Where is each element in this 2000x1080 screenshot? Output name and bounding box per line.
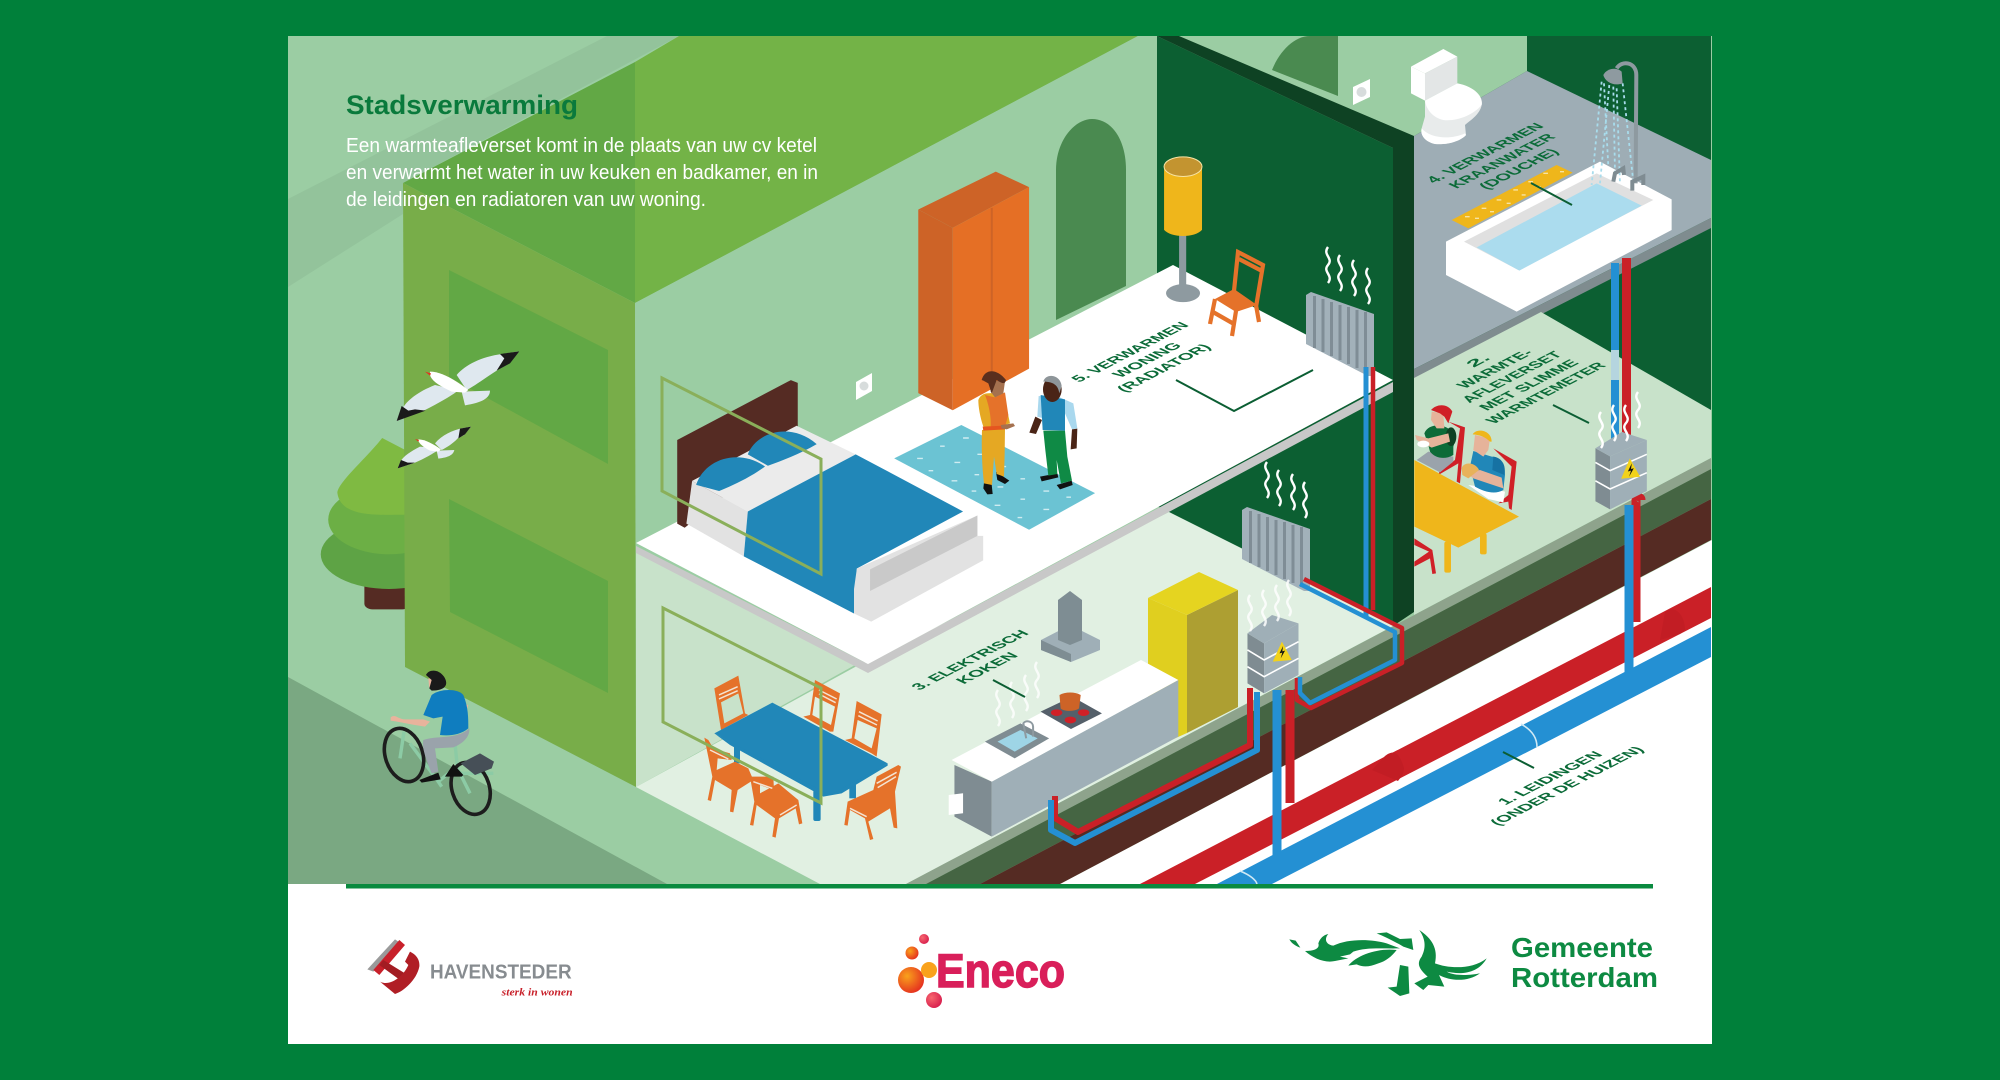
blanket bbox=[744, 454, 963, 613]
torso bbox=[423, 690, 468, 735]
pipes from mains to left meter bbox=[1277, 690, 1290, 856]
couple at table bbox=[1414, 405, 1519, 574]
label 1: leidingen bbox=[1470, 737, 1648, 828]
first-floor slab bbox=[636, 265, 1393, 673]
sheets bbox=[692, 426, 856, 511]
second arched doorway bbox=[1272, 36, 1338, 96]
yellow fridge bbox=[1148, 572, 1238, 745]
shoes bbox=[419, 764, 463, 783]
wall socket bedroom bbox=[856, 373, 872, 400]
extractor hood bbox=[1041, 591, 1100, 662]
label 1: leidingen: 1. LEIDINGEN bbox=[1495, 750, 1607, 807]
label 5: verwarmen woning: WONING bbox=[1109, 341, 1186, 380]
intro text: en verwarmt het water in uw keuken en badkamer, en in bbox=[346, 162, 818, 184]
pipes from meter to bathtub bbox=[1611, 258, 1631, 445]
label 3: elektrisch koken bbox=[909, 629, 1050, 700]
emblem bbox=[367, 939, 419, 994]
bathtub with shower bbox=[1446, 63, 1672, 312]
red chairs bbox=[1438, 422, 1517, 510]
leader 5 bbox=[1176, 370, 1313, 411]
kitchen wall under slab bbox=[636, 552, 855, 787]
label 4: verwarmen kraanwater: KRAANWATER bbox=[1446, 132, 1560, 191]
footboard bbox=[854, 516, 983, 622]
meter box right bbox=[1595, 432, 1647, 509]
heat waves downstairs bbox=[1265, 462, 1307, 518]
wordmark: HAVENSTEDER bbox=[430, 961, 572, 983]
label 2: warmte-afleverset: WARMTEMETER bbox=[1483, 361, 1610, 426]
back wall of living room bbox=[635, 36, 1158, 546]
arched doorway bbox=[1056, 119, 1126, 320]
bath taps bbox=[1613, 168, 1643, 191]
hair bbox=[426, 671, 446, 691]
icon: tree bbox=[321, 438, 457, 609]
window frame kitchen bbox=[663, 608, 821, 803]
bathtub bbox=[1446, 162, 1672, 312]
title: Stadsverwarming bbox=[346, 90, 578, 120]
intro text: Een warmteafleverset komt in de plaats van uw cv ketel bbox=[346, 135, 817, 157]
pipes from mains to right meter bbox=[1629, 498, 1641, 672]
kitchen counter bbox=[949, 660, 1178, 837]
pipes to sink bbox=[1051, 688, 1257, 843]
floor lamp bbox=[1164, 157, 1202, 302]
white card bbox=[288, 36, 1712, 1044]
kitchen floor bbox=[636, 512, 1395, 884]
pipe: blue district main bbox=[1217, 627, 1711, 884]
man seated bbox=[1462, 431, 1505, 502]
dining set bbox=[704, 676, 901, 840]
label 2: warmte-afleverset: WARMTE- bbox=[1454, 348, 1538, 391]
ground floor room right bbox=[1414, 312, 1711, 615]
label 2: warmte-afleverset: MET SLIMME bbox=[1476, 358, 1583, 413]
pillows bbox=[696, 432, 817, 491]
icon: small seagull bbox=[398, 427, 471, 468]
orbs bbox=[898, 934, 942, 1008]
woman seated bbox=[1415, 405, 1456, 472]
stove bbox=[1041, 692, 1102, 729]
label 3: elektrisch koken: 3. ELEKTRISCH bbox=[909, 629, 1033, 692]
tagline: sterk in wonen bbox=[500, 988, 573, 999]
radiator downstairs bbox=[1242, 507, 1310, 591]
cooking steam bbox=[996, 662, 1039, 726]
dark dividing wall bbox=[1157, 36, 1393, 626]
label 2: warmte-afleverset: 2. bbox=[1463, 353, 1495, 369]
wordmark bbox=[1511, 932, 1658, 993]
leader 2 bbox=[1553, 405, 1589, 423]
wheels bbox=[378, 723, 497, 819]
wordmark: Rotterdam bbox=[1511, 962, 1658, 993]
label 3: elektrisch koken: KOKEN bbox=[953, 651, 1023, 686]
front red chair bbox=[1414, 538, 1436, 574]
green rule bbox=[346, 884, 1653, 888]
icon: toilet bbox=[1411, 49, 1482, 144]
birds bbox=[397, 351, 519, 468]
label 5: verwarmen woning: (RADIATOR) bbox=[1114, 342, 1215, 394]
building roof bbox=[403, 36, 1138, 303]
chairs behind table bbox=[714, 676, 882, 757]
wall socket upper bbox=[1353, 79, 1370, 105]
label 4: verwarmen kraanwater: (DOUCHE) bbox=[1476, 147, 1563, 192]
leader 3 bbox=[993, 680, 1025, 697]
arms bbox=[391, 703, 468, 727]
logo: Eneco bbox=[898, 934, 1065, 1008]
orange chair bbox=[1210, 252, 1263, 336]
woman bbox=[978, 371, 1015, 494]
shower head bbox=[1603, 69, 1623, 84]
label 1: leidingen: (ONDER DE HUIZEN) bbox=[1487, 745, 1648, 828]
logo: Havensteder bbox=[367, 939, 573, 999]
heat waves upstairs bbox=[1326, 247, 1370, 304]
leader 1 bbox=[1503, 752, 1534, 768]
headboard bbox=[677, 380, 798, 528]
label 2: warmte-afleverset bbox=[1415, 329, 1610, 426]
bed bbox=[677, 380, 983, 622]
street bbox=[288, 677, 667, 884]
bathroom back wall bbox=[1337, 36, 1527, 136]
foundation strips bbox=[906, 458, 1711, 884]
cyclist bbox=[378, 671, 497, 819]
chair slats bbox=[719, 687, 878, 725]
label 4: verwarmen kraanwater bbox=[1424, 122, 1582, 201]
shower pipe bbox=[1617, 63, 1636, 183]
head bbox=[428, 678, 432, 688]
diagonal band in the sky bbox=[288, 36, 679, 287]
label 5: verwarmen woning: 5. VERWARMEN bbox=[1069, 321, 1193, 384]
meter box left bbox=[1247, 615, 1298, 693]
man bbox=[1029, 376, 1077, 489]
far-right dark wall bbox=[1414, 36, 1711, 420]
icon: large seagull bbox=[397, 351, 519, 421]
bath mat bbox=[1452, 165, 1573, 228]
chairs in front of table bbox=[704, 738, 901, 840]
sky bbox=[288, 36, 1712, 884]
wall end cap bbox=[1157, 36, 1414, 626]
leader 4 bbox=[1531, 183, 1572, 205]
bicycle frame bbox=[400, 732, 493, 793]
shower drops bbox=[1592, 82, 1633, 185]
lion emblem bbox=[1289, 930, 1487, 996]
table bbox=[1414, 460, 1519, 573]
table bbox=[714, 703, 888, 821]
intro text: de leidingen en radiatoren van uw woning. bbox=[346, 189, 706, 211]
wordmark: Eneco bbox=[936, 944, 1065, 997]
front chair slats bbox=[708, 745, 897, 817]
rug bbox=[894, 425, 1095, 530]
bathroom floor bbox=[1414, 71, 1711, 379]
pipe: red district main bbox=[1140, 587, 1711, 884]
label 2: warmte-afleverset: AFLEVERSET bbox=[1459, 350, 1567, 405]
intro text bbox=[346, 135, 818, 211]
bag bbox=[461, 753, 494, 775]
logo: Gemeente Rotterdam bbox=[1289, 930, 1658, 996]
radiator upstairs bbox=[1306, 292, 1374, 376]
steam right meter bbox=[1599, 392, 1640, 448]
sink bbox=[985, 721, 1049, 758]
window frame bedroom bbox=[662, 378, 821, 574]
legs bbox=[423, 728, 469, 773]
steam left meter bbox=[1248, 580, 1291, 631]
wordmark: Gemeente bbox=[1511, 932, 1653, 963]
wardrobe bbox=[918, 172, 1029, 410]
people in bedroom bbox=[978, 371, 1077, 494]
radiator loop pipes bbox=[1297, 367, 1402, 708]
building side wall bbox=[403, 183, 636, 787]
label 5: verwarmen woning bbox=[1069, 321, 1227, 400]
label 4: verwarmen kraanwater: 4. VERWARMEN bbox=[1424, 122, 1548, 185]
